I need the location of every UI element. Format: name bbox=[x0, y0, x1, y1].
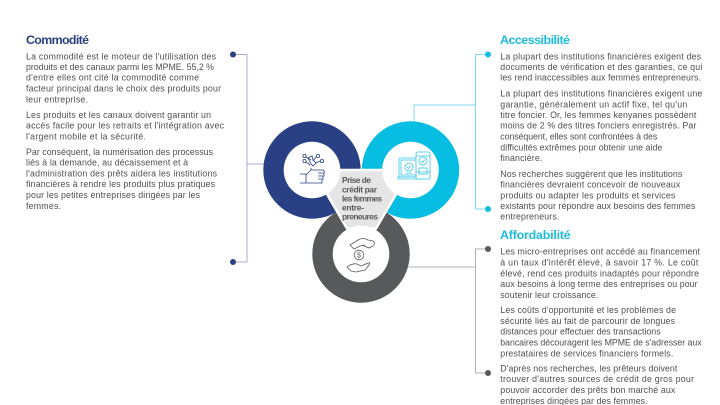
heading: Accessibilité: Accessibilité bbox=[500, 33, 570, 47]
text block: Commodité paragraphs: produits et des canaux parmi les MPME. 55,2 % bbox=[26, 62, 214, 72]
text block: Affordabilité paragraphs: à un taux d'intérêt élevé, à savoir 17 %. Le coût bbox=[500, 257, 699, 267]
ring: cyan bbox=[362, 121, 459, 219]
text block: Accessibilité paragraphs: conséquent, elles sont confrontées à des bbox=[500, 132, 658, 142]
text block: Accessibilité paragraphs: moins de 2 % des titres fonciers enregistrés. Par bbox=[500, 121, 696, 131]
text block: Accessibilité paragraphs: La plupart des institutions financières exigent des bbox=[500, 52, 702, 62]
text block: Affordabilité paragraphs: Les micro-entreprises ont accédé au financement bbox=[500, 247, 701, 257]
text block: Affordabilité paragraphs: distances pour effectuer des transactions bbox=[500, 327, 661, 337]
text block: Accessibilité paragraphs bbox=[500, 52, 702, 222]
icon: hands with dollar coin bbox=[347, 238, 374, 272]
text block: Commodité paragraphs: femmes. bbox=[26, 201, 61, 211]
text block: Accessibilité paragraphs: les rend inaccessibles aux femmes entrepreneurs. bbox=[500, 73, 701, 83]
text block: Accessibilité paragraphs: difficultés extrêmes pour obtenir une aide bbox=[500, 142, 662, 152]
panel: Affordabilité text bbox=[500, 228, 702, 405]
ring hole: grey bbox=[333, 226, 389, 282]
text block: Accessibilité paragraphs: documents de vérification et des garanties, ce qui bbox=[500, 62, 702, 72]
text block: Commodité paragraphs: financières à rendre les produits plus pratiques bbox=[26, 179, 216, 189]
text block: Commodité paragraphs: accès facile pour les retraits et l'intégration avec bbox=[26, 121, 225, 131]
text block: Commodité paragraphs bbox=[26, 52, 225, 211]
text block: Commodité paragraphs: leur entreprise. bbox=[26, 95, 88, 105]
text block: Accessibilité paragraphs: existants pour répondre aux besoins des femmes bbox=[500, 201, 696, 211]
text block: Affordabilité paragraphs: pouvoir accorder des prêts bon marché aux bbox=[500, 385, 676, 395]
text block: Affordabilité paragraphs: soutenir leur croissance. bbox=[500, 290, 598, 300]
ring: grey bbox=[312, 205, 410, 303]
ring: navy bbox=[263, 121, 361, 219]
text block: Commodité paragraphs: facteur principal dans le choix des produits pour bbox=[26, 83, 221, 93]
ring hole: navy bbox=[284, 142, 340, 198]
icon: thumbs up with sparkles bbox=[300, 154, 324, 183]
text block: Accessibilité paragraphs: produits ou adapter les produits et services bbox=[500, 190, 676, 200]
text block: Accessibilité paragraphs: titre foncier. Or, les femmes kenyanes possèdent bbox=[500, 110, 697, 120]
text block: Accessibilité paragraphs: financière. bbox=[500, 153, 542, 163]
text block: Affordabilité paragraphs: bancaires découragent les MPME de s'adresser aux bbox=[500, 338, 702, 348]
text block: Affordabilité paragraphs: élevé, rend ces produits inadaptés pour répondre bbox=[500, 268, 699, 278]
connector: cyan bracket bbox=[414, 52, 491, 212]
text block: Accessibilité paragraphs: Nos recherches suggèrent que les institutions bbox=[500, 169, 683, 179]
text block: Accessibilité paragraphs: garantie, généralement un actif fixe, tel qu'un bbox=[500, 99, 687, 109]
heading: Commodité: Commodité bbox=[26, 33, 89, 47]
text block: Commodité paragraphs: d'entre elles ont cité la commodité comme bbox=[26, 73, 199, 83]
text block: Commodité paragraphs: Par conséquent, la numérisation des processus bbox=[26, 147, 214, 157]
diagram: three rings bbox=[263, 121, 459, 303]
connector: navy bracket bbox=[230, 52, 264, 265]
text block: Commodité paragraphs: l'argent mobile et la sécurité. bbox=[26, 132, 146, 142]
central grey hexagon bbox=[327, 170, 396, 228]
heading: Affordabilité: Affordabilité bbox=[500, 228, 571, 242]
text block: Commodité paragraphs: Les produits et les canaux doivent garantir un bbox=[26, 110, 211, 120]
panel: Accessibilité text bbox=[500, 33, 702, 222]
text block: Accessibilité paragraphs: financières devraient concevoir de nouveaux bbox=[500, 180, 681, 190]
central label: crédit par bbox=[342, 184, 378, 194]
text block: Affordabilité paragraphs: prestataires de services financiers formels. bbox=[500, 348, 673, 358]
connector: grey bracket bbox=[408, 246, 491, 376]
text block: Commodité paragraphs: La commodité est le moteur de l'utilisation des bbox=[26, 52, 217, 62]
text block: Affordabilité paragraphs: sécurité liés au fait de parcourir de longues bbox=[500, 316, 676, 326]
text block: Affordabilité paragraphs: Les coûts d'opportunité et les problèmes de bbox=[500, 305, 676, 315]
central label: Prise de bbox=[342, 175, 371, 185]
text block: Commodité paragraphs: liés à la demande, au décaissement et à bbox=[26, 158, 188, 168]
text block: Affordabilité paragraphs: aux besoins à long terme des entreprises ou pour bbox=[500, 279, 698, 289]
text block: Affordabilité paragraphs: trouver d'autres sources de crédit de gros pour bbox=[500, 374, 694, 384]
panel: Commodité text bbox=[26, 33, 225, 211]
text block: Commodité paragraphs: l'administration des prêts aidera les institutions bbox=[26, 169, 218, 179]
text block: Commodité paragraphs: pour les petites entreprises dirigées par les bbox=[26, 190, 201, 200]
central label: les femmes bbox=[342, 193, 382, 203]
icon: laptop and phone with check marks bbox=[398, 152, 430, 179]
central label: preneures bbox=[342, 212, 378, 222]
text block: Affordabilité paragraphs: D'après nos recherches, les prêteurs doivent bbox=[500, 363, 678, 373]
text block: Accessibilité paragraphs: La plupart des institutions financières exigent une bbox=[500, 89, 702, 99]
central label: entre- bbox=[342, 202, 364, 212]
ring hole: cyan bbox=[382, 142, 439, 198]
text block: Affordabilité paragraphs bbox=[500, 247, 702, 405]
text block: Accessibilité paragraphs: entrepreneurs. bbox=[500, 212, 559, 222]
icon: hands with dollar coin: $ bbox=[357, 252, 361, 260]
